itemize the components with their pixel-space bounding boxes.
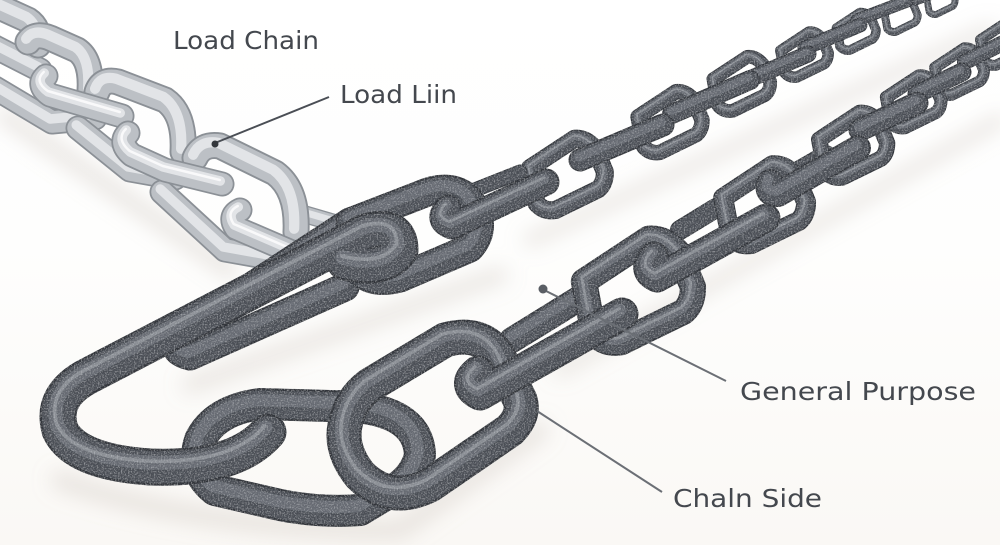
welded bottom link [195, 400, 420, 511]
lower chain far front bars [964, 40, 1000, 62]
rear bar of foreground link [510, 295, 580, 340]
large hairpin link [55, 223, 400, 467]
upper dark chain front bars [462, 0, 955, 195]
label: General Purpose: General Purpose [740, 377, 976, 406]
silver front bars [40, 72, 315, 262]
lower dark chain [510, 20, 1000, 343]
upper dark chain open links [528, 0, 955, 210]
silver lower bars [0, 44, 270, 258]
lower chain large open link [582, 234, 693, 343]
silver link behind [296, 210, 345, 226]
front bar of upper chain [440, 178, 546, 226]
large front open link [341, 332, 521, 493]
silver load chain [0, 2, 345, 262]
leader: General Purpose [538, 284, 726, 381]
foreground diagonal bar [468, 309, 622, 394]
label: Load Chain: Load Chain [173, 26, 319, 55]
lower chain open links [721, 20, 1000, 244]
leader: Chain Side [537, 411, 662, 492]
silver upper links [0, 2, 296, 232]
lower chain rear bars [680, 155, 826, 230]
label: Chaln Side: Chaln Side [673, 484, 822, 513]
leader: Load Liin [212, 97, 329, 148]
label: Load Liin: Load Liin [340, 80, 457, 109]
long link under hairpin [174, 186, 480, 356]
